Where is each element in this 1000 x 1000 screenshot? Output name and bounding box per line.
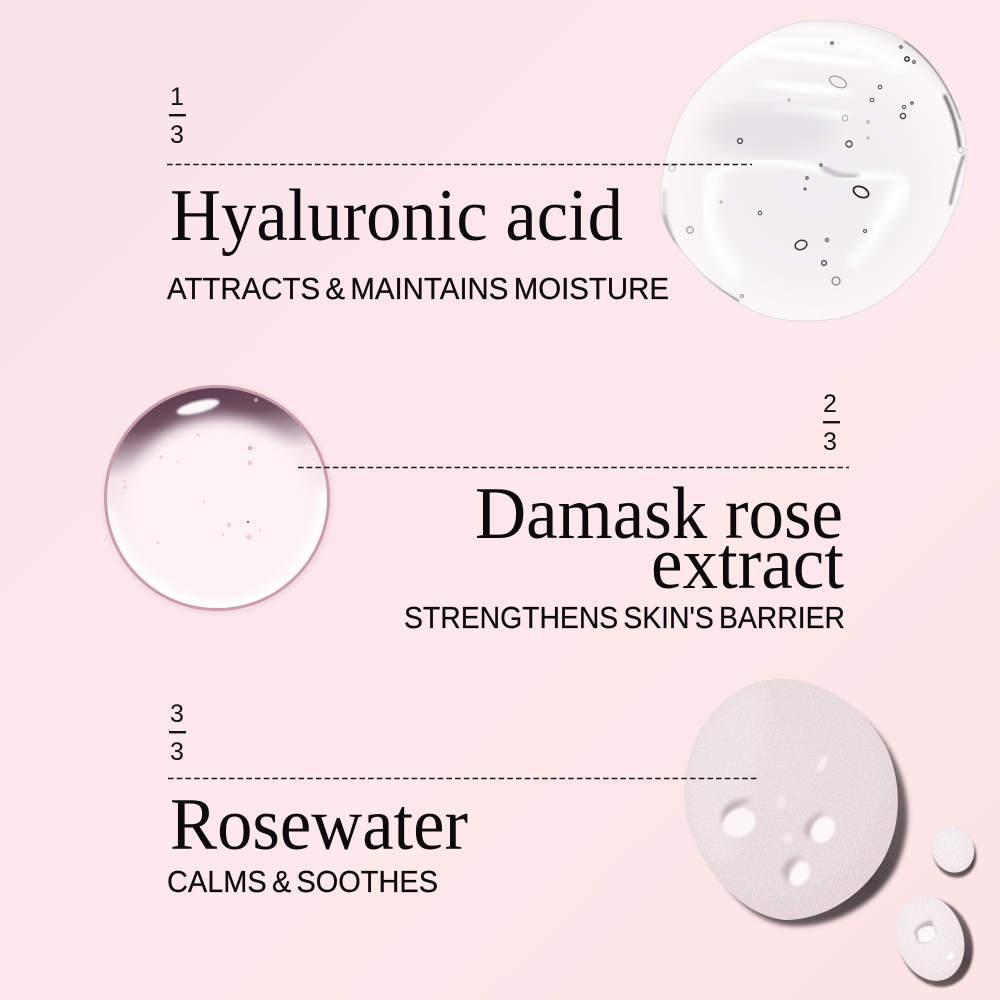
fraction: 3 of 3: 3 [170,738,184,766]
divider line [168,778,757,780]
text: benefit: ATTRACTS & MAINTAINS MOISTURE [167,271,669,306]
fraction: 1 of 3: 3 [170,121,184,149]
fraction: 1 of 3 [169,83,186,149]
text: benefit: STRENGTHENS SKIN'S BARRIER [404,600,845,635]
heading: Rosewater: Rosewater [170,784,468,866]
small foam drop [925,819,983,884]
heading: Damask rose extract: Damask rose [475,473,843,555]
large foam blob [680,670,910,930]
heading: Hyaluronic acid: Hyaluronic acid [170,175,623,257]
icon: clear gel blob [660,21,966,321]
panel: rosewater [167,670,985,998]
icon: pink gel drop [103,385,333,614]
divider line [298,466,849,468]
fraction: 1 of 3: 1 [170,83,184,111]
divider line [167,164,752,166]
fraction: 3 of 3: 3 [170,700,184,728]
fraction: 2 of 3: 3 [823,428,837,456]
text: benefit: CALMS & SOOTHES [167,864,438,899]
panel: hyaluronic acid [167,21,966,321]
medium foam drop [884,885,985,998]
fraction: 3 of 3 [169,700,186,766]
fraction: 2 of 3: 2 [823,390,837,418]
fraction: 2 of 3 [823,390,840,456]
icon: foam blobs [680,670,985,998]
panel: damask rose extract [103,385,849,635]
heading: Damask rose extract [475,473,844,605]
bubbles [669,42,964,298]
heading: Damask rose extract: extract [651,523,844,605]
